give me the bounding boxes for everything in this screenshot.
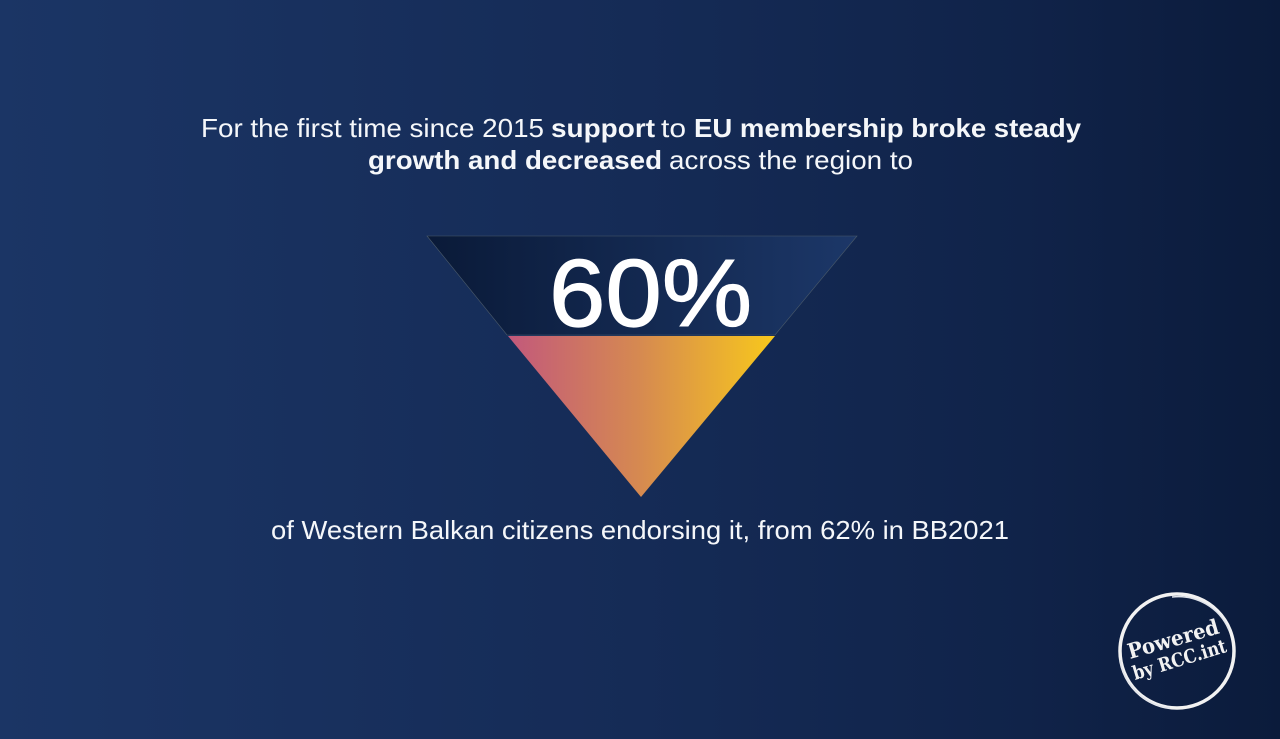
heading text: to [661,113,686,143]
heading text: across the region to [669,145,913,175]
caption text: of Western Balkan citizens endorsing it, from 62% in BB2021 [271,515,1009,545]
triangle: upper dark section [427,236,857,335]
heading text: EU membership broke steady [694,113,1082,143]
heading text: For the first time since 2015 [201,113,544,143]
triangle: lower gradient section [508,336,775,497]
stamp: Powered by RCC.int [1120,594,1234,708]
value: 60%: 60% [549,240,752,347]
heading text: growth and decreased [368,145,662,175]
heading text: support [551,113,655,143]
inverted triangle chart [427,236,857,497]
heading text [201,113,1082,175]
stamp: Powered by RCC.int: Powered [1124,614,1222,664]
stamp: Powered by RCC.int: by RCC.int [1130,635,1229,685]
